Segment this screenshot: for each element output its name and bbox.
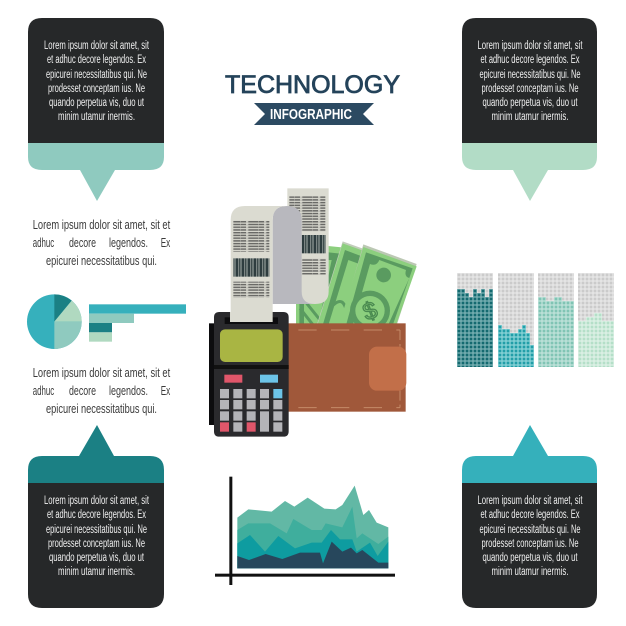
callout text: [44, 495, 150, 578]
text block: upper middle-left: decore: [69, 235, 96, 250]
text block: upper middle-left: Lorem ipsum dolor sit amet, sit et: [33, 217, 170, 232]
callout text: quando perpetua vis, duo ut: [49, 97, 145, 109]
callout text: prodesset conceptam ius. Ne: [482, 83, 578, 95]
callout text: quando perpetua vis, duo ut: [482, 97, 578, 109]
area chart: [215, 477, 395, 585]
text block: lower middle-left: adhuc: [33, 383, 55, 398]
title: TECHNOLOGY: [225, 71, 400, 99]
pie chart: [27, 294, 82, 349]
callout text: minim utamur inermis.: [58, 566, 135, 578]
callout shape: [28, 483, 164, 608]
callout text: minim utamur inermis.: [58, 111, 135, 123]
wallet: [287, 323, 406, 412]
panel: bottom-left callout: [28, 425, 164, 608]
pixel column chart: [457, 273, 614, 367]
payment terminal: [209, 312, 289, 437]
callout text: prodesset conceptam ius. Ne: [482, 538, 578, 550]
receipt front strip: [231, 206, 287, 323]
text block: lower middle-left: Lorem ipsum dolor sit amet, sit et: [33, 365, 170, 380]
callout accent band with pointer: [462, 425, 597, 483]
callout text: epicurei necessitatibus qui. Ne: [46, 69, 147, 81]
area layers: [237, 486, 388, 568]
callout accent band with pointer: [28, 425, 164, 483]
callout accent band with pointer: [28, 143, 164, 201]
text block: upper middle-left: Ex: [161, 235, 171, 250]
banknote middle: [317, 242, 362, 324]
keypad: [220, 389, 282, 432]
text block: lower middle-left: [33, 365, 171, 416]
text block: lower middle-left: epicurei necessitatibus qui.: [46, 401, 157, 416]
text block: upper middle-left: epicurei necessitatibus qui.: [46, 253, 157, 268]
callout shape: [28, 18, 164, 143]
callout text: quando perpetua vis, duo ut: [49, 552, 145, 564]
callout text: [44, 40, 150, 123]
callout shape: [462, 18, 597, 143]
horizontal bars: [89, 304, 186, 342]
pie and bar chart: [27, 294, 186, 349]
callout text: [478, 40, 583, 123]
subtitle ribbon: INFOGRAPHIC: [270, 107, 352, 123]
panel: bottom-right callout: [462, 425, 597, 608]
chart axes: [215, 477, 395, 585]
text block: upper middle-left: [33, 217, 171, 268]
text block: upper middle-left: adhuc: [33, 235, 55, 250]
banknote front: $: [359, 296, 381, 326]
banknote back: [296, 246, 341, 324]
banknotes: [296, 241, 417, 331]
callout text: epicurei necessitatibus qui. Ne: [46, 524, 147, 536]
callout text: Lorem ipsum dolor sit amet, sit: [44, 495, 150, 507]
text block: lower middle-left: decore: [69, 383, 96, 398]
subtitle ribbon: [254, 103, 374, 125]
callout text: [478, 495, 583, 578]
callout text: quando perpetua vis, duo ut: [482, 552, 578, 564]
text block: lower middle-left: legendos.: [109, 383, 148, 398]
central illustration: payment terminal, receipt, wallet and cash: [209, 188, 417, 437]
callout text: minim utamur inermis.: [492, 566, 568, 578]
callout text: prodesset conceptam ius. Ne: [48, 538, 145, 550]
callout shape: [462, 483, 597, 608]
panel: top-left callout: [28, 18, 164, 201]
receipt back strip: [287, 188, 329, 304]
callout text: et adhuc decore legendos. Ex: [47, 509, 146, 521]
panel: top-right callout: [462, 18, 597, 201]
text block: lower middle-left: Ex: [161, 383, 171, 398]
callout text: et adhuc decore legendos. Ex: [47, 54, 146, 66]
callout text: minim utamur inermis.: [492, 111, 568, 123]
callout text: Lorem ipsum dolor sit amet, sit: [44, 40, 150, 52]
receipt fold shadow: [273, 206, 315, 304]
callout accent band with pointer: [462, 143, 597, 201]
callout text: prodesset conceptam ius. Ne: [48, 83, 145, 95]
text block: upper middle-left: legendos.: [109, 235, 148, 250]
